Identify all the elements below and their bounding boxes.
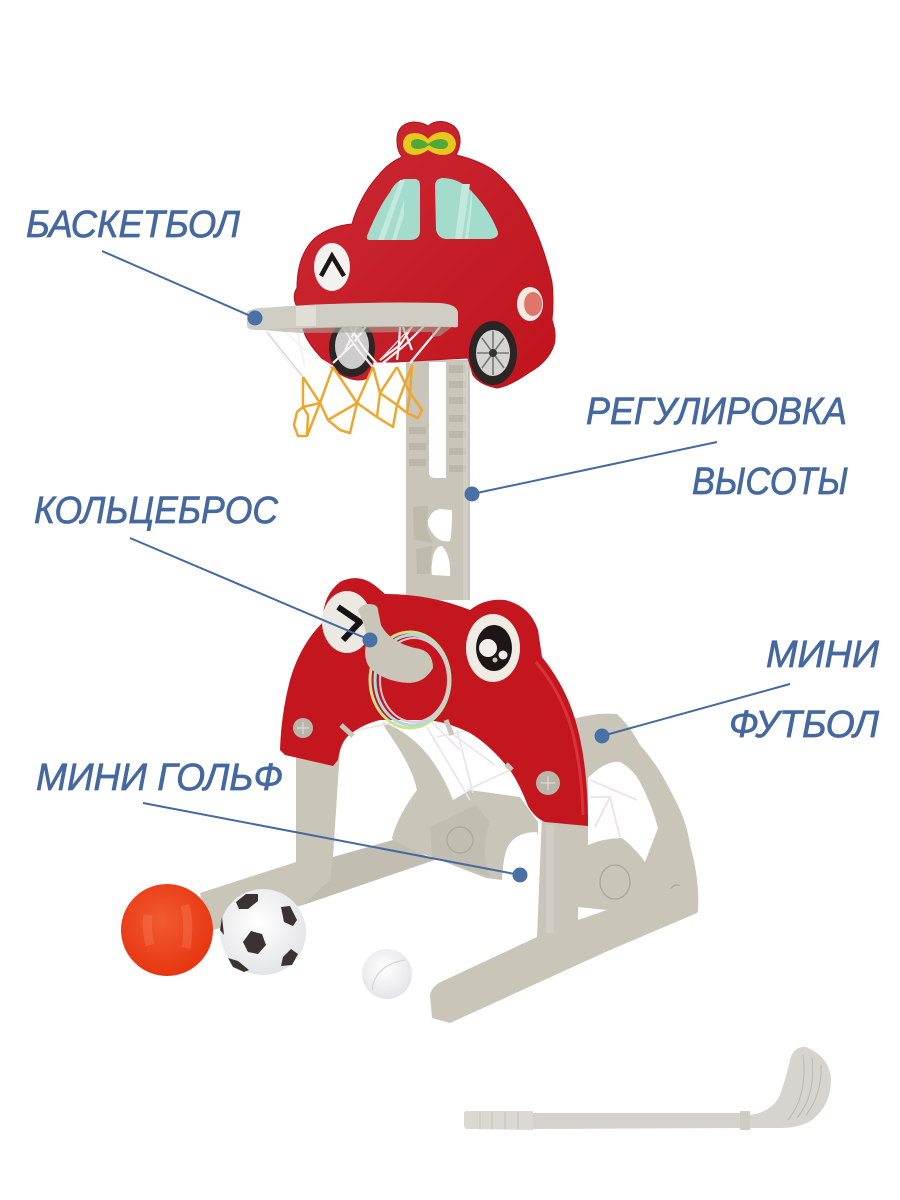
right eye: [466, 614, 520, 682]
orange net: [294, 365, 422, 436]
golf club: [464, 1047, 831, 1130]
orange basketball: [121, 884, 213, 976]
left leg and base bar: [200, 750, 435, 930]
label: ring toss: КОЛЬЦЕБРОС: [34, 490, 279, 532]
rear goal frame right: [570, 714, 698, 945]
rear goal frame left: [383, 722, 538, 900]
rings and hook: [358, 604, 450, 728]
tail light: [517, 287, 543, 321]
rear goal net left: [357, 718, 510, 800]
label: height adjustment: РЕГУЛИРОВКА: [586, 391, 847, 433]
label: mini football: [594, 634, 880, 746]
car body: [294, 122, 555, 388]
height-adjustable pole: [406, 360, 470, 600]
label: mini football: ФУТБОЛ: [729, 704, 880, 746]
headlight: [314, 243, 350, 291]
right leg and foot: [430, 815, 697, 1023]
white net: [267, 325, 440, 377]
windows: [367, 179, 420, 240]
basketball rim: [247, 303, 458, 337]
label: height adjustment: ВЫСОТЫ: [692, 461, 848, 503]
label: mini golf: МИНИ ГОЛЬФ: [36, 757, 283, 799]
left eye: [322, 591, 372, 653]
front wheel: [329, 319, 375, 377]
red goal arch: [280, 578, 588, 826]
label: height adjustment: [464, 391, 848, 503]
label: basketball: [26, 204, 262, 326]
soccer ball: [220, 889, 306, 975]
screw right: [536, 771, 560, 795]
label: mini football: МИНИ: [766, 634, 880, 676]
label: basketball: БАСКЕТБОЛ: [26, 204, 241, 246]
roof ornament: [403, 132, 456, 155]
rear wheel: [469, 321, 517, 385]
label: ring toss: [34, 490, 378, 648]
label: mini golf: [36, 757, 528, 882]
backboard: red car: [294, 122, 555, 388]
golf ball: [362, 949, 412, 999]
rear goal net right: [590, 780, 637, 837]
screw left: [293, 718, 313, 738]
